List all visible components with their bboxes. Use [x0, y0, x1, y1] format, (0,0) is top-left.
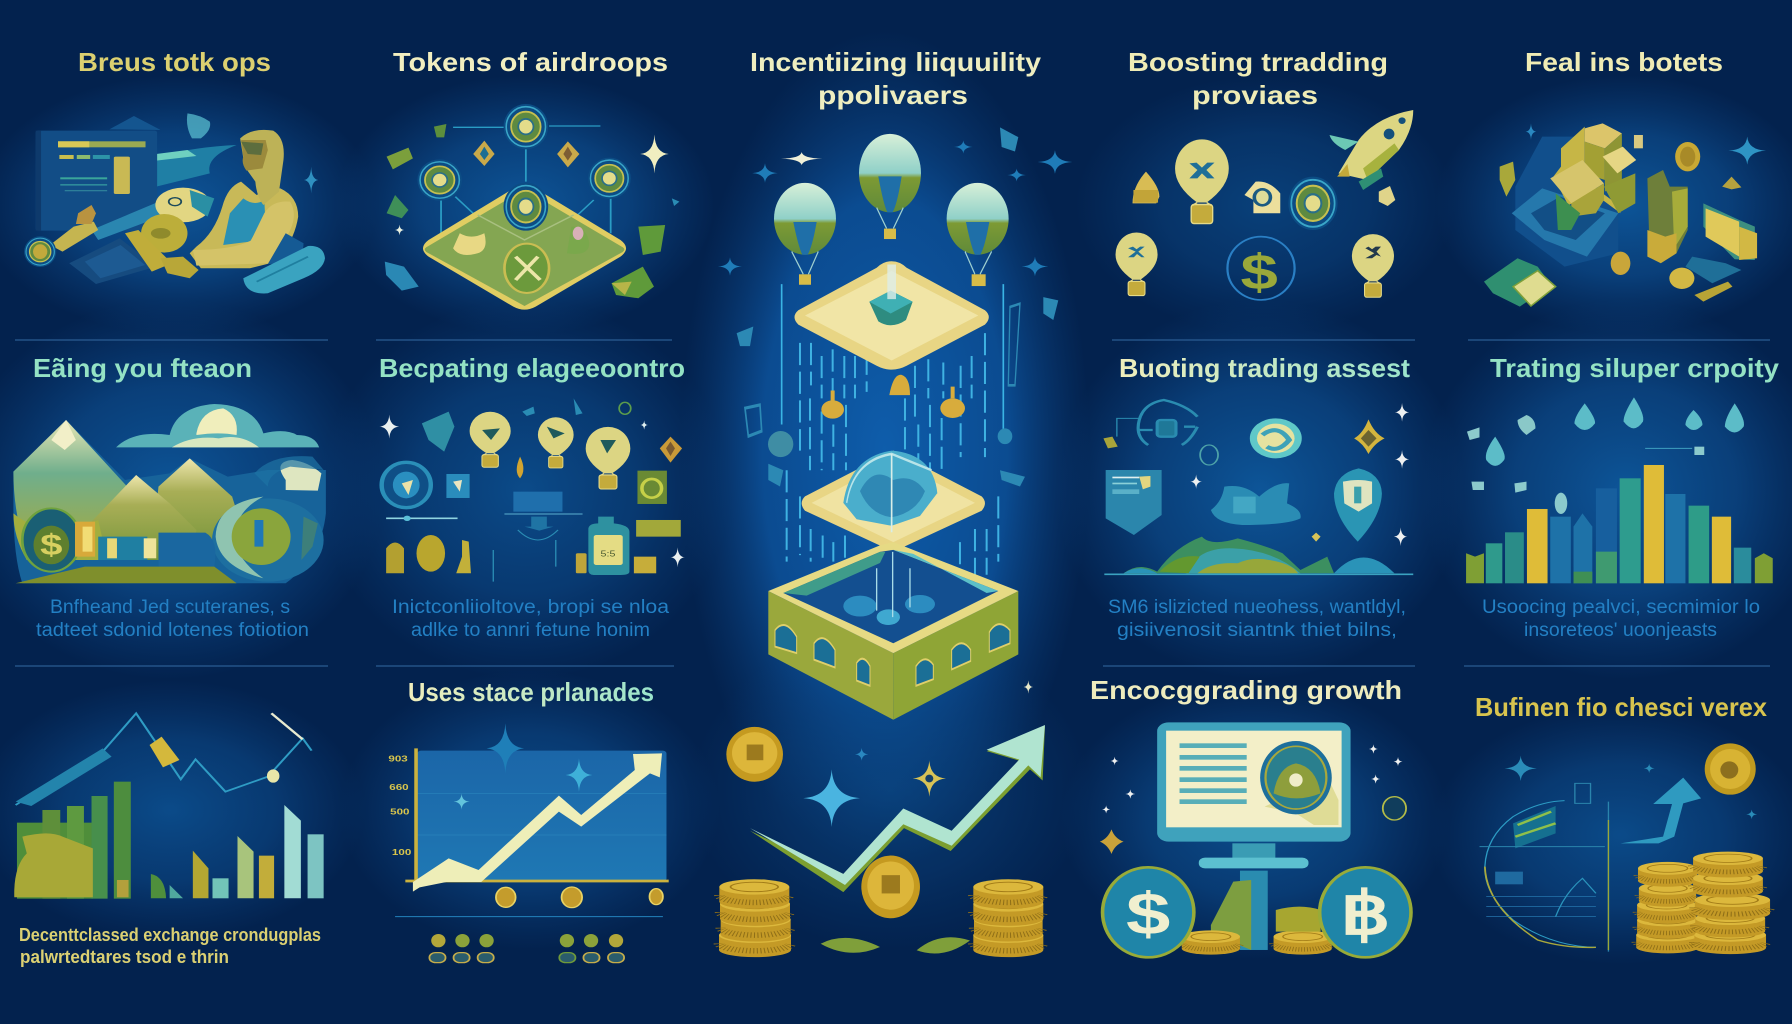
dollar emblem [22, 508, 95, 572]
axis labels: 100 [392, 848, 412, 858]
monitor [1157, 722, 1351, 842]
dollar coins [1103, 867, 1194, 957]
description: adlke to annri fetune honim [411, 620, 650, 641]
description: Usoocing pealvci, secmimior lo [1482, 597, 1760, 618]
tank top [223, 198, 265, 245]
lower platform [802, 451, 985, 551]
sparkle [304, 167, 318, 193]
panel: boosting trading providers [1116, 47, 1413, 300]
description: insoreteos' uoonjeasts [1524, 620, 1717, 641]
horizon glow [13, 420, 326, 583]
keyboard [69, 238, 156, 284]
coin stacks [1636, 862, 1699, 953]
heading: Incentiizing liiquuility [750, 47, 1042, 77]
illustration: balloons, platforms, fountain [718, 127, 1072, 957]
dollar medallion: $ [1241, 244, 1278, 300]
dollar medallion [1227, 237, 1295, 300]
droplets [1486, 397, 1744, 466]
dollar emblem: $ [40, 528, 63, 562]
arm and hand [50, 222, 98, 252]
heading: Breus totk ops [78, 47, 271, 77]
illustration: stacked cubes and laptop [1484, 123, 1766, 307]
panel: tokens of airdrops [385, 47, 679, 310]
panel: top-left person at workstation [24, 47, 325, 293]
illustration: monitor and dollar coins: ฿ [1340, 880, 1391, 947]
heading: Becpating elageeoontro [379, 353, 685, 383]
description: Inictconliioltove, bropi se nloa [392, 597, 669, 618]
panel: liquidity bars [1466, 353, 1780, 641]
bars [1466, 465, 1773, 583]
gold cubes [1550, 123, 1636, 217]
cloud [1211, 483, 1301, 525]
gold figures [386, 542, 404, 573]
statue [1647, 170, 1688, 263]
loose objects [1484, 123, 1766, 307]
description: SM6 islizicted nueohess, wantldyl, [1108, 597, 1406, 618]
small icons [1467, 427, 1704, 514]
description: Bnfheand Jed scuteranes, s [50, 597, 290, 618]
description [1482, 597, 1760, 641]
illustration: arc chart, arrow, coin stacks [1479, 743, 1770, 954]
chart: rising line [388, 723, 669, 963]
heading: Eãing you fteaon [33, 353, 252, 383]
heading [750, 47, 1042, 110]
heading: Boosting trradding [1128, 47, 1388, 77]
panel: trading asset network [1103, 353, 1413, 641]
coin on arrow [861, 856, 920, 918]
gold star [1354, 419, 1385, 454]
growth arrow [750, 725, 1045, 892]
illustration: mountain landscape [13, 404, 326, 583]
balloons [774, 134, 1009, 286]
description: tadteet sdonid lotenes fotiotion [36, 620, 309, 641]
heading: Buoting trading assest [1119, 353, 1410, 383]
sleeve [193, 201, 294, 266]
panel: bottom-right coins and arc [1475, 692, 1770, 954]
illustration: balloons and icon cluster: 5:5 [601, 550, 615, 559]
up arrow [1621, 778, 1701, 843]
teal cushion [243, 246, 325, 293]
axis labels: 500 [390, 808, 410, 817]
heading: Encocggrading growth [1090, 675, 1402, 705]
right coin stack [973, 879, 1043, 957]
ringed globe [212, 456, 324, 582]
location pin [1334, 468, 1382, 542]
panel: balloons and icons [379, 353, 685, 641]
hills [1104, 537, 1413, 574]
heading: Tokens of airdroops [393, 47, 668, 77]
dividers [15, 340, 1770, 666]
hair [240, 130, 284, 205]
panel: mountains [13, 353, 326, 641]
floating gold drops [821, 375, 965, 419]
panel: top-right gold isometric stack [1484, 47, 1766, 307]
heading: Uses stace prlanades [408, 677, 654, 707]
heading: Feal ins botets [1525, 47, 1723, 77]
gems and stars [473, 141, 495, 166]
stars and bits [718, 127, 1072, 487]
left coin stack [719, 879, 791, 957]
illustration: balloons and icon cluster [379, 398, 685, 582]
basin windows [775, 624, 1010, 686]
upper platform [794, 261, 989, 370]
description [36, 597, 309, 641]
description: gisiivenosit siantnk thiet bilns, [1117, 620, 1397, 641]
heading: Trating siluper crpoity [1490, 353, 1780, 383]
torso [190, 182, 298, 268]
gold coin [1705, 743, 1756, 795]
sparkles [803, 681, 1033, 827]
monitor stand [1199, 843, 1308, 950]
stars [1102, 744, 1402, 813]
chart: patterned bars and droplets [1466, 397, 1773, 583]
panel: center incentivizing liquidity [718, 47, 1072, 957]
coin [726, 727, 783, 782]
axis labels: 660 [389, 783, 409, 793]
description [19, 925, 321, 967]
heading [1128, 47, 1388, 110]
fountain basin [768, 542, 1018, 720]
illustration: monitor and dollar coins [1100, 722, 1411, 957]
screen [36, 131, 157, 231]
description [392, 597, 669, 641]
heading: Bufinen fio chesci verex [1475, 692, 1768, 722]
balloons [1175, 139, 1229, 224]
dollar coins: $ [1126, 880, 1170, 947]
jar [588, 517, 629, 575]
laptop and notes [1685, 203, 1757, 283]
axis labels [388, 755, 412, 858]
platform [423, 187, 626, 310]
rain lines [787, 333, 998, 601]
illustration: rocket and balloons [1116, 110, 1413, 300]
description: Decenttclassed exchange crondugplas [19, 925, 321, 945]
swirl token [1250, 418, 1302, 458]
green card [637, 471, 667, 504]
target [382, 462, 470, 521]
mini icon rows [431, 934, 623, 947]
axis labels: 903 [388, 755, 408, 764]
panel: growth chart [388, 677, 669, 963]
axis coins [496, 887, 663, 908]
illustration: network, pin and hills [1103, 400, 1413, 574]
panel: encouraging growth [1090, 675, 1411, 957]
shield card [1106, 470, 1162, 535]
network emblem [1117, 400, 1197, 445]
description [1108, 597, 1406, 641]
clouds [116, 404, 319, 447]
upper tokens [504, 104, 548, 149]
gold coins [1182, 907, 1332, 955]
rocket [1330, 110, 1413, 190]
panel: bottom-left bar chart [14, 713, 324, 967]
illustration: person at screen [24, 113, 325, 293]
flat green discs [821, 937, 970, 954]
token ring [1288, 177, 1338, 230]
illustration: token platform [385, 104, 679, 310]
chart: bars and trend [14, 713, 324, 899]
arc diagram [1479, 783, 1608, 952]
heading: ppolivaers [818, 80, 968, 110]
heading: proviaes [1192, 80, 1318, 110]
description: palwrtedtares tsod e thrin [20, 947, 229, 967]
gold objects in hands [155, 188, 211, 222]
